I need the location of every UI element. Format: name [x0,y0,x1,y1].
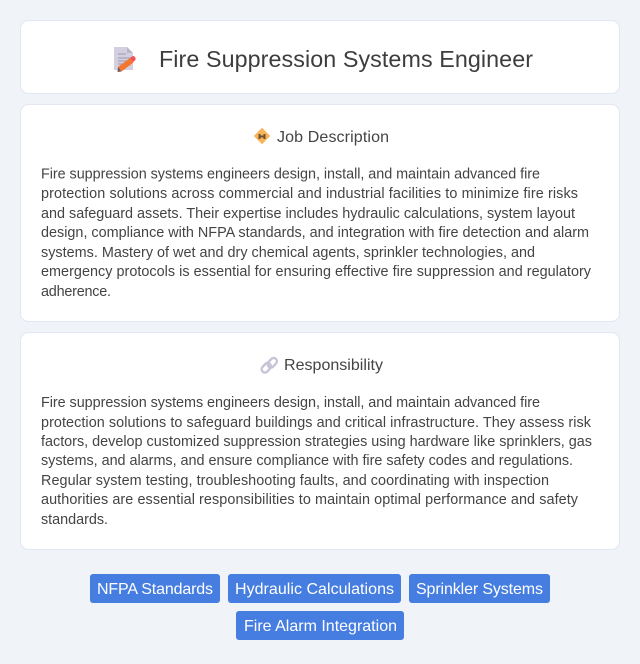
text block: job description: Fire suppression systems engineers design, install, and maintain advanced fire [41,166,540,182]
icon: diamond sign [254,128,270,144]
tag: Hydraulic Calculations [228,574,401,603]
tag: NFPA Standards: NFPA Standards [97,581,213,598]
heading: responsibility: Responsibility [284,357,383,374]
text block: job description: emergency protocols is essential for ensuring effective fire suppression and regulatory [41,264,592,280]
text block: responsibility: factors, develop customized suppression strategies using hardware like sprinklers, gas [41,434,592,450]
tag: Sprinkler Systems [409,574,550,603]
text block: responsibility [41,395,592,528]
text block: responsibility: protection solutions to safeguard buildings and critical infrastructure. They assess risk [41,415,592,431]
panel: responsibility [20,332,620,550]
text block: responsibility: authorities are essential responsibilities to maintain optimal performance and safety [41,492,579,508]
text block: job description: systems. Mastery of wet and dry chemical agents, sprinkler technologies, and [41,245,535,261]
heading: title text: Fire Suppression Systems Engineer [159,46,533,72]
panel: title [20,20,620,94]
icon: document with pencil [114,47,136,72]
text block: job description: and safeguard assets. Their expertise includes hydraulic calculations, system layout [41,206,575,222]
heading: job description: Job Description [277,129,389,146]
text block: responsibility: standards. [41,512,108,528]
icon: chain link [260,357,278,374]
tag: Hydraulic Calculations: Hydraulic Calculations [235,581,394,598]
text block: responsibility: Regular system testing, troubleshooting faults, and coordinating with inspection [41,473,549,489]
text block: responsibility: systems, and alarms, and ensure compliance with fire safety codes and regulations. [41,453,573,469]
text block: responsibility: Fire suppression systems engineers design, install, and maintain advanced fire [41,395,540,411]
text block: job description: design, compliance with NFPA standards, and integration with fire detection and alarm [41,225,589,241]
text block: job description [41,166,592,300]
text block: job description: protection solutions across commercial and industrial facilities to minimize fire risks [41,186,578,202]
tag: Fire Alarm Integration [236,611,404,640]
panel: job description [20,104,620,322]
text block: job description: adherence. [41,284,111,300]
tag: Sprinkler Systems: Sprinkler Systems [416,581,543,598]
tag: Fire Alarm Integration: Fire Alarm Integration [244,618,397,635]
tag: NFPA Standards [90,574,220,603]
